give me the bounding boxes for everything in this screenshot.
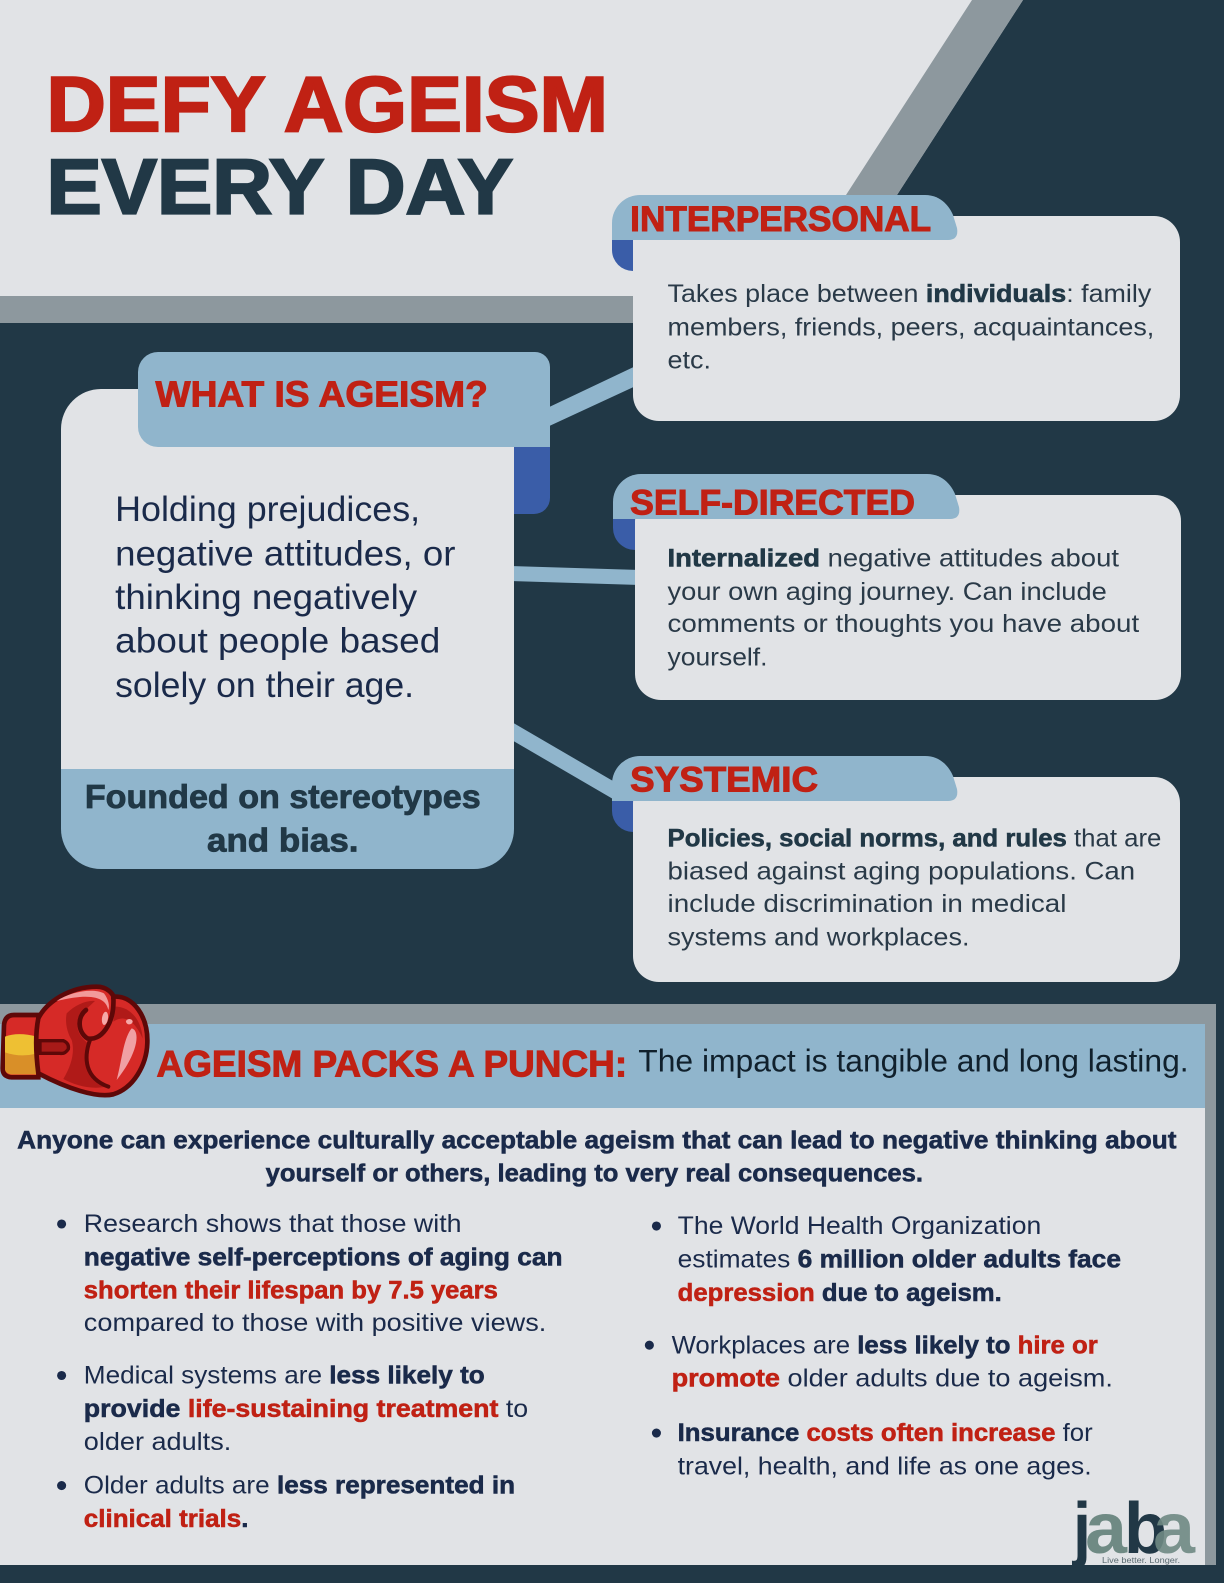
- card text: your own aging journey. Can include: [668, 578, 1107, 606]
- card text: comments or thoughts you have about: [668, 610, 1139, 638]
- card text: etc.: [668, 347, 711, 375]
- bullet list: right column: depression due to ageism.: [678, 1279, 1002, 1307]
- connector: ageism to systemic: [510, 721, 625, 806]
- card text: [630, 484, 1139, 672]
- background: grey horizontal band: [0, 296, 640, 323]
- card text: Internalized negative attitudes about: [668, 545, 1119, 573]
- shading: [63, 1001, 107, 1088]
- bullet list: right column: Insurance costs often increase for: [678, 1419, 1093, 1447]
- glove body: [36, 987, 147, 1095]
- logo: jaba: j: [1071, 1489, 1091, 1569]
- logo: jaba: b: [1124, 1489, 1167, 1569]
- card text: Policies, social norms, and rules that are: [668, 824, 1161, 852]
- panel text: thinking negatively: [115, 578, 417, 617]
- bullet list: left column: older adults.: [84, 1428, 231, 1456]
- lace: [40, 1041, 68, 1053]
- heading tab: [612, 195, 957, 240]
- bullet list: right column: promote older adults due to ageism.: [672, 1365, 1113, 1393]
- title: [46, 62, 608, 231]
- panel: what is ageism: [61, 352, 550, 869]
- bottom section: grey frame: [0, 1004, 1216, 1565]
- bullet list: left column: compared to those with positive views.: [84, 1309, 546, 1337]
- bullet list: left column: Medical systems are less likely to: [84, 1362, 485, 1390]
- panel footer band: [61, 769, 514, 869]
- bullet list: left column: provide life-sustaining treatment to: [84, 1395, 528, 1423]
- bullet list: left column: negative self-perceptions of aging can: [84, 1243, 563, 1271]
- logo: jaba: Live better. Longer.: [1102, 1555, 1180, 1565]
- highlights: [57, 991, 109, 1010]
- thumb lines: [87, 1040, 108, 1087]
- fold accent: [514, 447, 550, 514]
- background: dark middle: [0, 323, 1224, 1583]
- intro statement: Anyone can experience culturally acceptable ageism that can lead to negative thinking about: [17, 1126, 1177, 1154]
- intro statement: [17, 1126, 1177, 1188]
- panel body: [61, 389, 514, 769]
- bullet list: left column: Research shows that those with: [84, 1210, 462, 1238]
- bullet list: right column: The World Health Organization: [678, 1212, 1041, 1240]
- panel text: Founded on stereotypes: [85, 779, 481, 816]
- fold accent: [612, 240, 633, 271]
- bullet list: right column: travel, health, and life as one ages.: [678, 1452, 1092, 1480]
- icon: boxing glove: [3, 987, 147, 1095]
- card: [635, 495, 1181, 700]
- card text: INTERPERSONAL: [630, 200, 931, 239]
- panel text: [85, 373, 488, 859]
- bullet list: left column: clinical trials.: [84, 1505, 248, 1533]
- logo: jaba: a: [1153, 1489, 1196, 1569]
- background: grey diagonal stripe: [846, 0, 1023, 195]
- bullet list: left column: Older adults are less represented in: [84, 1472, 515, 1500]
- card text: include discrimination in medical: [668, 890, 1066, 918]
- banner: ageism packs a punch: AGEISM PACKS A PUNCH:: [157, 1043, 627, 1085]
- bottom section: light panel: [0, 1108, 1205, 1565]
- bullet list: left column: shorten their lifespan by 7.5 years: [84, 1277, 498, 1305]
- panel text: about people based: [115, 621, 440, 660]
- heading tab: [612, 756, 957, 801]
- card text: yourself.: [668, 644, 768, 672]
- panel text: negative attitudes, or: [115, 535, 456, 574]
- card: [633, 777, 1180, 982]
- background: dark diagonal area: [640, 0, 1224, 323]
- panel text: Holding prejudices,: [115, 490, 420, 529]
- panel: interpersonal: [612, 195, 1180, 421]
- fold accent: [612, 801, 633, 832]
- card text: members, friends, peers, acquaintances,: [668, 313, 1154, 341]
- intro statement: yourself or others, leading to very real consequences.: [266, 1160, 923, 1188]
- fold accent: [613, 519, 635, 550]
- panel: self-directed: [613, 474, 1181, 700]
- bullet list: right column: Workplaces are less likely to hire or: [672, 1331, 1098, 1359]
- bullet list: right column: estimates 6 million older adults face: [678, 1245, 1121, 1273]
- card text: [630, 760, 1161, 951]
- banner: ageism packs a punch: [0, 1024, 1205, 1108]
- panel text: solely on their age.: [115, 666, 414, 705]
- card text: SYSTEMIC: [630, 760, 818, 799]
- card text: Takes place between individuals : family: [668, 280, 1152, 308]
- background: light top area: [0, 0, 1224, 323]
- card text: systems and workplaces.: [668, 923, 970, 951]
- bullet list: right column: [645, 1212, 1121, 1480]
- card text: biased against aging populations. Can: [668, 858, 1135, 886]
- logo: jaba: a: [1085, 1489, 1128, 1569]
- connector: ageism to self-directed: [510, 566, 640, 585]
- title: EVERY DAY: [46, 145, 513, 231]
- banner: ageism packs a punch: The impact is tangible and long lasting.: [638, 1044, 1189, 1079]
- logo: jaba: [1071, 1489, 1196, 1569]
- card: [633, 216, 1180, 421]
- card text: SELF-DIRECTED: [630, 484, 915, 523]
- panel text: and bias.: [207, 822, 359, 859]
- title: DEFY AGEISM: [46, 62, 608, 148]
- cuff: [3, 1015, 38, 1077]
- heading tab: [613, 474, 959, 519]
- bullet list: left column: [57, 1210, 563, 1533]
- card text: [630, 200, 1154, 375]
- connector: ageism to interpersonal: [545, 364, 640, 428]
- panel text: WHAT IS AGEISM?: [156, 373, 488, 414]
- heading tab: [138, 352, 550, 447]
- panel: systemic: [612, 756, 1180, 982]
